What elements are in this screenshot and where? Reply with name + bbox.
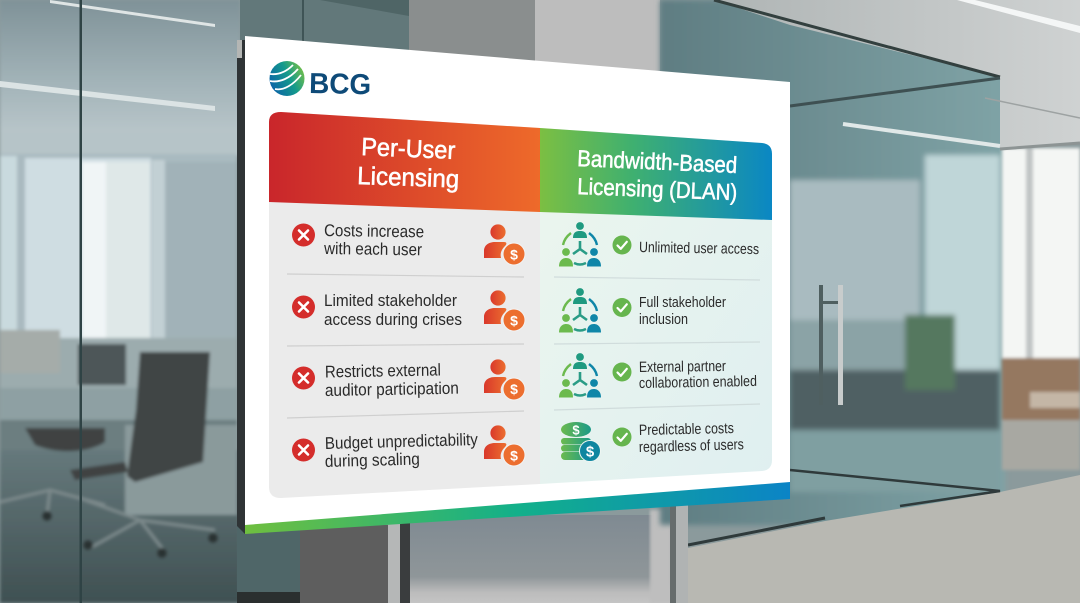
icon: user with dollar — [484, 359, 525, 400]
icon: user with dollar: $ — [510, 312, 518, 328]
sign mounting poles — [388, 498, 688, 603]
row: predictable costs — [561, 420, 744, 462]
row: restricts external — [292, 359, 525, 400]
bottom gradient stripe — [245, 482, 790, 534]
row: full stakeholder: Full stakeholder — [639, 294, 726, 311]
icon: user with dollar — [484, 290, 525, 331]
row: unlimited user access: Unlimited user access — [639, 239, 759, 258]
icon: green check — [612, 236, 632, 254]
logo: BCG: BCG — [309, 68, 372, 101]
row: restricts external: auditor participation — [325, 379, 459, 400]
header: bandwidth-based: Bandwidth-Based — [577, 145, 738, 178]
row: costs increase: with each user — [323, 239, 422, 259]
row: budget unpredictability: Budget unpredictability — [325, 430, 478, 453]
row: limited stakeholder: access during crises — [324, 310, 462, 329]
icon: red x — [292, 296, 315, 318]
central column — [409, 0, 535, 70]
icon: coin stack with dollar: $ — [586, 444, 595, 460]
sign side edge — [237, 40, 245, 534]
icon: globe — [270, 61, 304, 96]
icon: stakeholder network — [559, 222, 601, 266]
row: budget unpredictability: during scaling — [325, 450, 420, 471]
row: restricts external: Restricts external — [325, 360, 441, 381]
row: costs increase — [292, 221, 525, 265]
panel: per-user licensing — [269, 112, 540, 498]
row: budget unpredictability — [292, 425, 525, 471]
icon: red x — [292, 224, 315, 246]
icon: user with dollar: $ — [510, 246, 518, 262]
icon: user with dollar: $ — [510, 448, 518, 464]
row: full stakeholder — [559, 288, 726, 332]
icon: stakeholder network — [559, 288, 601, 332]
header: bandwidth-based: Licensing (DLAN) — [577, 173, 738, 205]
icon: red x — [292, 438, 315, 462]
row: external partner: External partner — [639, 358, 726, 376]
row: predictable costs: regardless of users — [639, 436, 744, 456]
row: limited stakeholder — [292, 290, 525, 331]
left glass room — [0, 0, 240, 603]
icon: stakeholder network — [559, 353, 601, 398]
row: external partner — [559, 353, 757, 398]
header: per-user: Licensing — [357, 162, 460, 194]
logo: BCG — [270, 61, 372, 101]
icon: user with dollar — [484, 224, 525, 265]
icon: user with dollar — [484, 425, 525, 466]
row: unlimited user access — [559, 222, 759, 266]
row: full stakeholder: inclusion — [639, 311, 688, 328]
header: per-user — [269, 112, 540, 212]
right glass and room — [660, 0, 1005, 525]
panel: bandwidth-based licensing — [540, 128, 772, 484]
floor right — [688, 475, 1080, 603]
row: external partner: collaboration enabled — [639, 373, 757, 392]
icon: user with dollar: $ — [510, 381, 518, 397]
header: bandwidth-based — [540, 128, 772, 220]
header: per-user: Per-User — [361, 133, 456, 165]
icon: green check — [612, 298, 632, 317]
sign board — [237, 36, 790, 534]
row: predictable costs: Predictable costs — [639, 420, 734, 439]
icon: coin stack with dollar: $ — [572, 422, 580, 438]
icon: green check — [612, 362, 632, 382]
row: limited stakeholder: Limited stakeholder — [324, 291, 457, 310]
glass segment behind sign top — [240, 0, 409, 60]
icon: coin stack with dollar — [561, 422, 600, 462]
row: costs increase: Costs increase — [324, 221, 424, 241]
icon: green check — [612, 428, 632, 446]
icon: red x — [292, 366, 315, 390]
